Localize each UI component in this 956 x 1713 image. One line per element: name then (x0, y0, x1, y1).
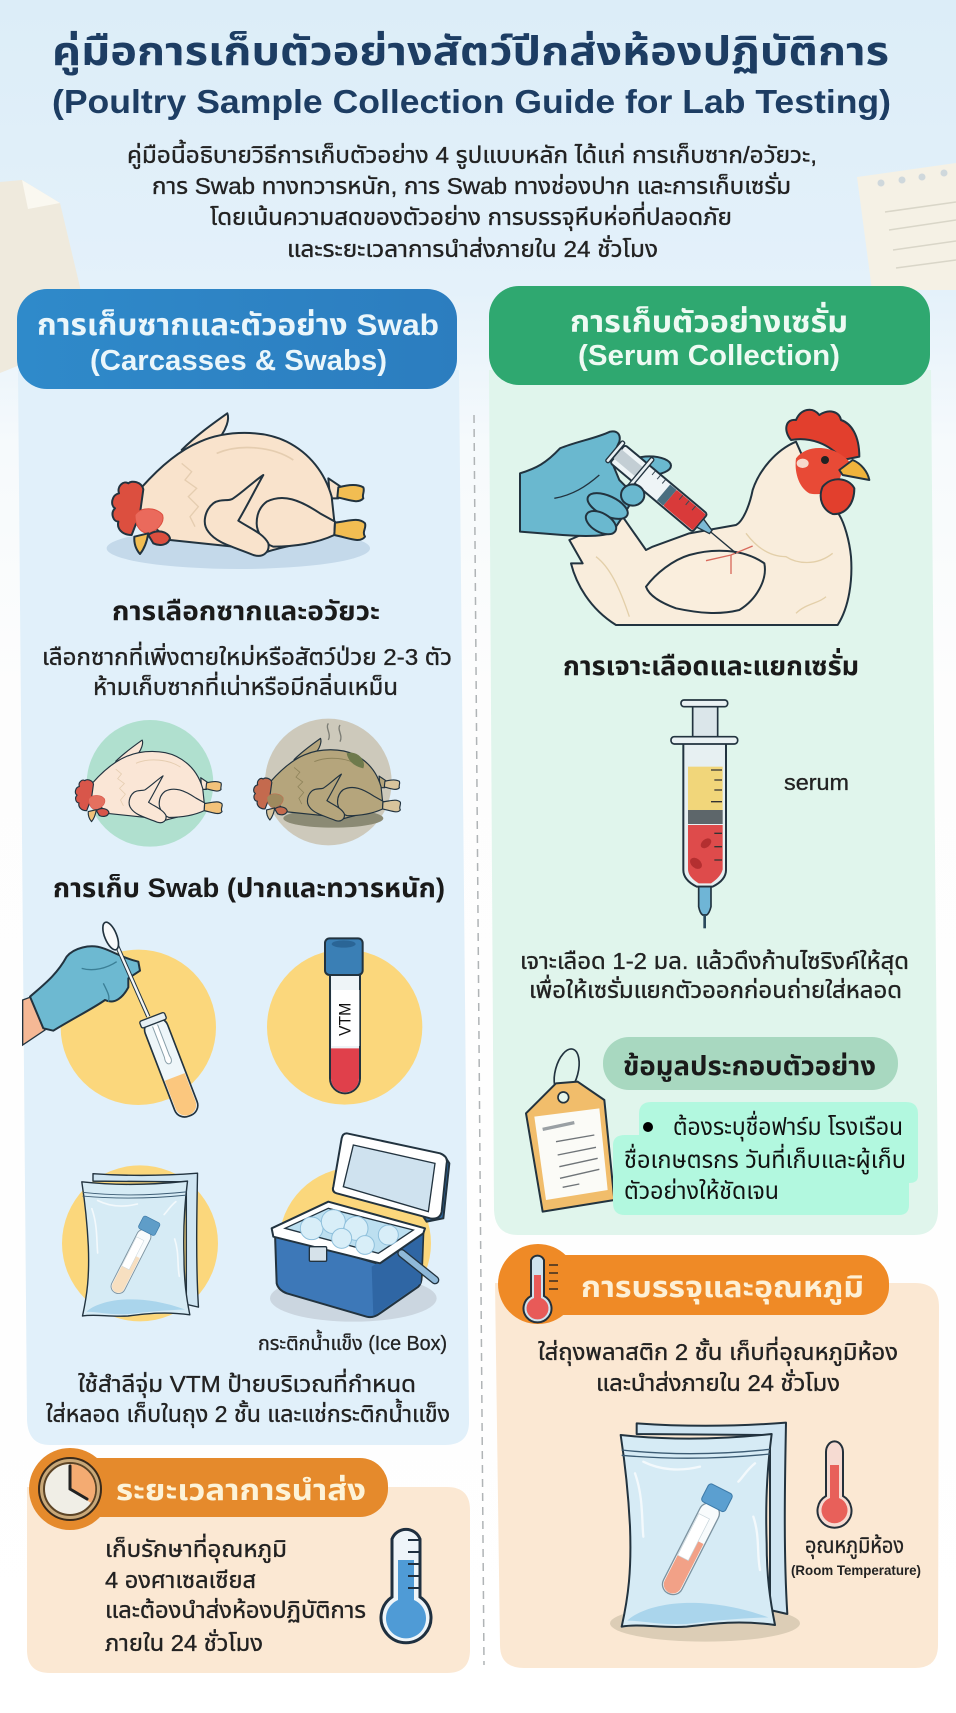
text: carcass selection (42, 641, 452, 700)
icon: rotten carcass (254, 719, 401, 845)
text: packing instructions: ใส่ถุงพลาสติก 2 ชั้น เก็บที่อุณหภูมิห้อง (538, 1336, 898, 1367)
heading: serum collection: (Serum Collection) (578, 340, 840, 372)
text: packing instructions (538, 1336, 898, 1396)
chicken beak (839, 460, 869, 480)
intro text block (127, 139, 817, 262)
panel: carcasses and swabs background (18, 370, 469, 1445)
heading: carcasses and swabs: (Carcasses & Swabs) (90, 345, 387, 377)
text: blood draw instructions: เพื่อให้เซรั่มแยกตัวออกก่อนถ่ายใส่หลอด (529, 974, 902, 1003)
heading: serum collection: การเก็บตัวอย่างเซรั่ม (570, 301, 848, 339)
text: blood draw instructions: เจาะเลือด 1-2 มล. แล้วดึงก้านไซริงค์ให้สุด (520, 948, 909, 975)
text: required sample information highlighted (613, 1102, 918, 1215)
intro text block: โดยเน้นความสดของตัวอย่าง การบรรจุหีบห่อที่ปลอดภัย (210, 201, 732, 231)
chicken comb (786, 410, 859, 460)
icon: clock (39, 1458, 101, 1520)
panel: transport time background (27, 1487, 470, 1673)
text: required sample information highlighted: ตัวอย่างให้ชัดเจน (624, 1177, 779, 1205)
icon: room temperature sample bag (610, 1423, 800, 1642)
label: room temperature: (Room Temperature) (791, 1562, 921, 1578)
subheading: blood draw: การเจาะเลือดและแยกเซรั่ม (563, 648, 859, 681)
glove index finger (628, 456, 671, 475)
illustration: blood draw from chicken wing (520, 410, 869, 625)
icon: separated serum syringe (671, 700, 738, 928)
heading: sample information: ข้อมูลประกอบตัวอย่าง (623, 1051, 876, 1082)
text: required sample information highlighted: ต้องระบุชื่อฟาร์ม โรงเรือน (673, 1110, 903, 1142)
subheading: swab collection: การเก็บ Swab (ปากและทวารหนัก) (53, 873, 445, 903)
icon: red thermometer (817, 1441, 852, 1528)
heading: transport time with clock: ระยะเวลาการนำส่ง (116, 1475, 366, 1507)
panel: serum collection background (489, 370, 938, 1235)
glove fingers (582, 484, 644, 539)
text: transport time instructions: เก็บรักษาที่อุณหภูมิ (105, 1533, 287, 1564)
heading: carcasses and swabs (17, 289, 457, 389)
heading: transport time with clock (29, 1448, 388, 1530)
label: room temperature: อุณหภูมิห้อง (805, 1533, 904, 1559)
subheading: selecting carcasses: การเลือกซากและอวัยวะ (112, 596, 380, 626)
glove palm (520, 431, 633, 536)
icon: VTM tube: VTM (336, 1003, 355, 1036)
label: room temperature (791, 1533, 921, 1578)
icon: gloved hand with swab and tube (23, 920, 216, 1121)
intro text block: คู่มือนี้อธิบายวิธีการเก็บตัวอย่าง 4 รูปแบบหลัก ได้แก่ การเก็บซาก/อวัยวะ, (127, 139, 817, 170)
text: transport time instructions: ภายใน 24 ชั่วโมง (105, 1628, 263, 1656)
title: (Poultry Sample Collection Guide for Lab Testing) (52, 83, 891, 120)
label: serum: serum (784, 770, 849, 795)
text: swab instructions (46, 1368, 450, 1428)
text: transport time instructions: 4 องศาเซลเซียส (105, 1567, 256, 1593)
syringe (601, 436, 749, 568)
chicken wing (646, 551, 765, 613)
icon: sample tag (526, 1046, 614, 1212)
icon: ice box (270, 1133, 449, 1322)
heading: serum collection (489, 286, 930, 385)
caption: ice box: กระติกน้ำแข็ง (Ice Box) (258, 1329, 447, 1355)
chicken head (796, 448, 849, 494)
text: blood draw instructions (520, 948, 909, 1003)
decorative paper note left (0, 180, 82, 373)
icon: VTM tube (267, 938, 422, 1105)
intro text block: การ Swab ทางทวารหนัก, การ Swab ทางช่องปาก และการเก็บเซรั่ม (152, 171, 791, 199)
text: swab instructions: ใช้สำลีจุ่ม VTM ป้ายบริเวณที่กำหนด (78, 1368, 416, 1398)
text: packing instructions: และนำส่งภายใน 24 ชั่วโมง (596, 1368, 840, 1396)
icon: cold thermometer (381, 1529, 431, 1643)
icon: fresh carcass (75, 720, 222, 847)
heading: packing and temperature: การบรรจุและอุณหภูมิ (581, 1272, 864, 1305)
heading: carcasses and swabs: การเก็บซากและตัวอย่าง Swab (37, 308, 439, 342)
heading: packing and temperature (498, 1244, 889, 1324)
text: transport time instructions (105, 1533, 366, 1656)
panel: packing and temperature background (495, 1283, 939, 1668)
title (52, 29, 891, 120)
text: carcass selection: เลือกซากที่เพิ่งตายใหม่หรือสัตว์ป่วย 2-3 ตัว (42, 641, 452, 670)
text: transport time instructions: และต้องนำส่งห้องปฏิบัติการ (105, 1597, 366, 1623)
text: carcass selection: ห้ามเก็บซากที่เน่าหรือมีกลิ่นเหม็น (93, 671, 398, 700)
text: swab instructions: ใส่หลอด เก็บในถุง 2 ชั้น และแช่กระติกน้ำแข็ง (46, 1398, 450, 1428)
chicken body (569, 442, 851, 625)
icon: dead chicken (107, 413, 370, 569)
icon: double plastic bag (62, 1165, 218, 1321)
heading: sample information (603, 1037, 898, 1090)
text: required sample information highlighted: ชื่อเกษตรกร วันที่เก็บและผู้เก็บ (624, 1143, 906, 1175)
chicken wattle (821, 479, 854, 514)
decorative paper note right (857, 163, 956, 290)
icon: warm thermometer (524, 1256, 558, 1322)
intro text block: และระยะเวลาการนำส่งภายใน 24 ชั่วโมง (287, 234, 658, 262)
title: คู่มือการเก็บตัวอย่างสัตว์ปีกส่งห้องปฏิบัติการ (52, 29, 889, 76)
column divider (474, 415, 484, 1665)
